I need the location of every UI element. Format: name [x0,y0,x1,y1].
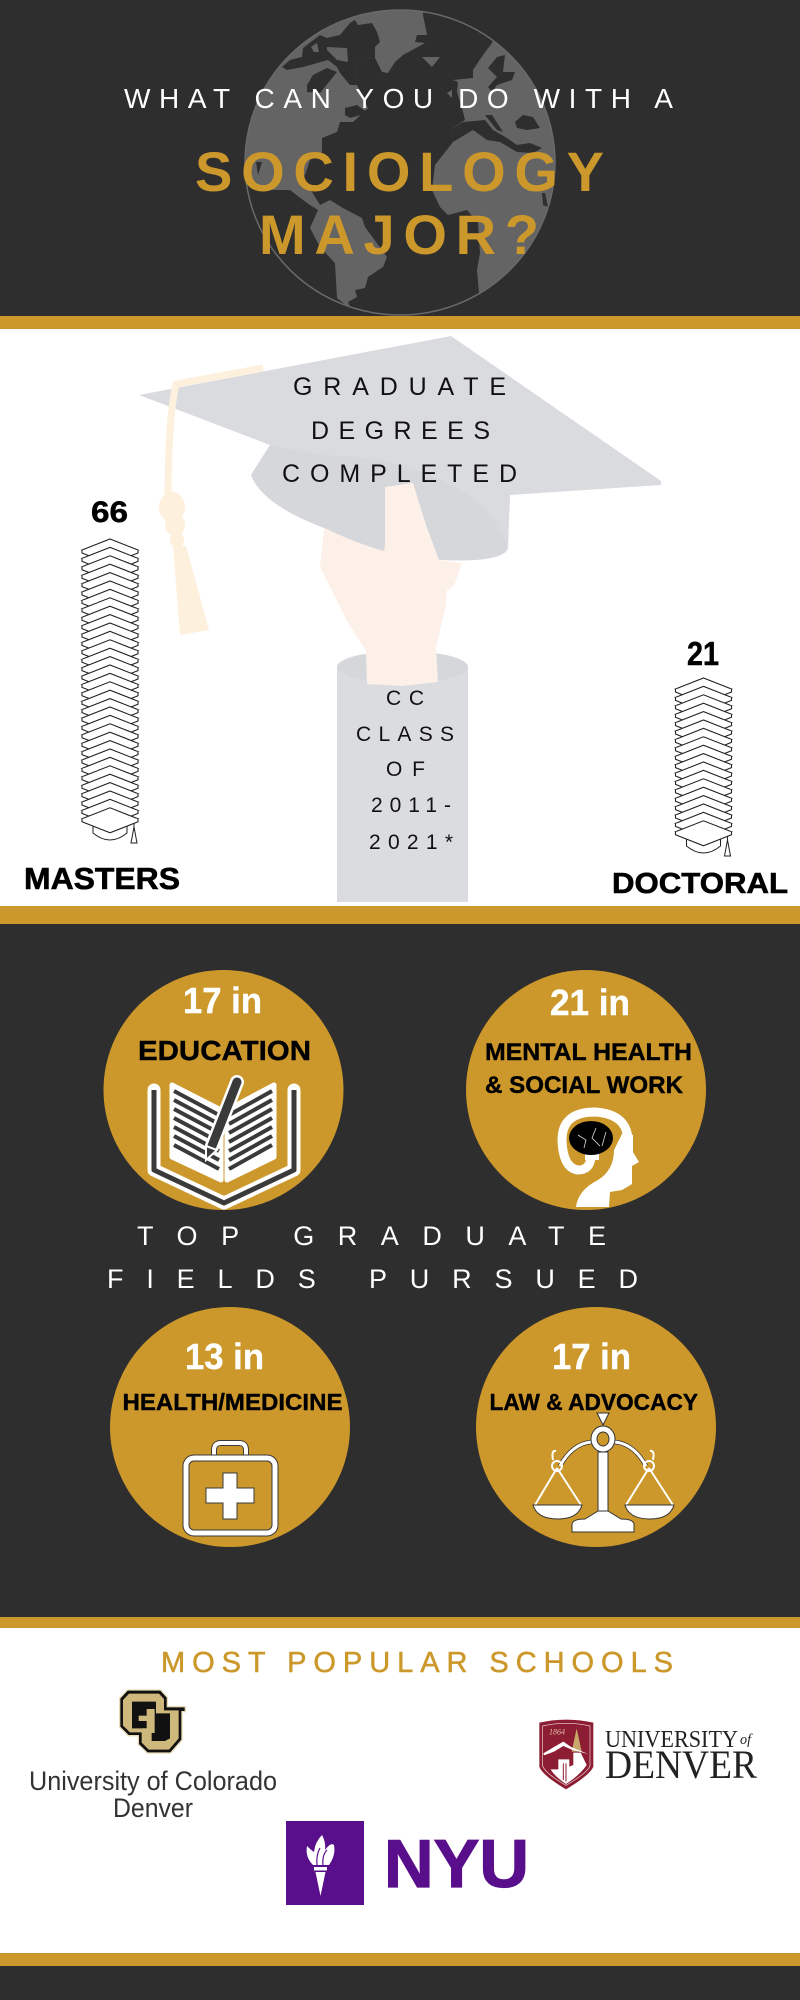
logo: NYU [286,1821,529,1905]
logo: NYU: NYU [384,1826,529,1902]
card: health and medicine: 13 in [185,1336,264,1377]
heading: graduate degrees completed: DEGREES [311,417,490,445]
heading: graduate degrees completed [282,373,517,488]
heading: major: MAJOR? [259,203,539,266]
card: mental health and social work: 21 in [550,982,630,1023]
icon: book and pencil [154,1082,294,1203]
text: cc class of 2011-2021 [356,687,454,854]
card: law and advocacy [476,1307,716,1547]
text: cc class of 2011-2021: CC [386,687,424,710]
illustration: hand holding graduation cap [139,336,661,902]
tassel [159,368,263,635]
logo: university of denver: of [740,1732,753,1748]
card: mental health and social work: MENTAL HEALTH [485,1039,692,1066]
logo: university of denver [539,1720,757,1789]
text: cc class of 2011-2021: 2011- [371,794,451,817]
logo: university of denver: DENVER [605,1742,757,1787]
logo: university of denver: 1864 [549,1727,565,1736]
logo: university of colorado denver: Denver [113,1793,193,1823]
card: education: EDUCATION [138,1035,311,1066]
card: mental health and social work: & SOCIAL WORK [485,1072,684,1099]
number: 21 doctoral: 21 [687,635,719,672]
text: cc class of 2011-2021: OF [386,758,425,781]
logo: university of colorado denver [29,1690,277,1823]
heading: what can you do with a: WHAT CAN YOU DO WITH A [124,83,673,114]
heading: graduate degrees completed: GRADUATE [293,373,506,401]
number: 66 masters: 66 [91,496,128,529]
card: education: 17 in [183,980,262,1021]
panel: header [124,9,673,316]
logo: university of denver: UNIVERSITY [605,1727,738,1753]
sleeve [337,648,468,902]
logo: university of colorado denver: University of Colorado [29,1766,277,1796]
globe [244,9,556,316]
panel: top graduate fields [0,924,800,1617]
stack: doctoral caps [676,678,732,856]
panel: most popular schools [0,1628,800,1953]
card: law and advocacy: 17 in [552,1336,631,1377]
heading: graduate degrees completed: COMPLETED [282,460,517,488]
card: education [104,970,344,1210]
panel: graduate degrees [0,329,800,906]
stack: masters caps [82,539,138,843]
heading: most popular schools: MOST POPULAR SCHOOLS [161,1647,673,1679]
label: doctoral: DOCTORAL [612,868,788,900]
card: health and medicine: HEALTH/MEDICINE [122,1389,342,1415]
text: cc class of 2011-2021: 2021* [369,831,453,854]
card: health and medicine [110,1307,350,1547]
text: cc class of 2011-2021: CLASS [356,723,454,746]
heading: top graduate fields pursued: FIELDS PURSUED [107,1264,638,1294]
heading: top graduate fields pursued [107,1221,638,1294]
label: masters: MASTERS [24,861,180,896]
heading: sociology: SOCIOLOGY [195,140,604,203]
icon: head with brain [562,1112,639,1207]
icon: scales of justice [533,1413,674,1532]
card: law and advocacy: LAW & ADVOCACY [490,1389,698,1415]
heading: top graduate fields pursued: TOP GRADUATE [137,1221,606,1251]
card: mental health and social work [466,970,706,1210]
icon: medical bag [186,1443,275,1533]
